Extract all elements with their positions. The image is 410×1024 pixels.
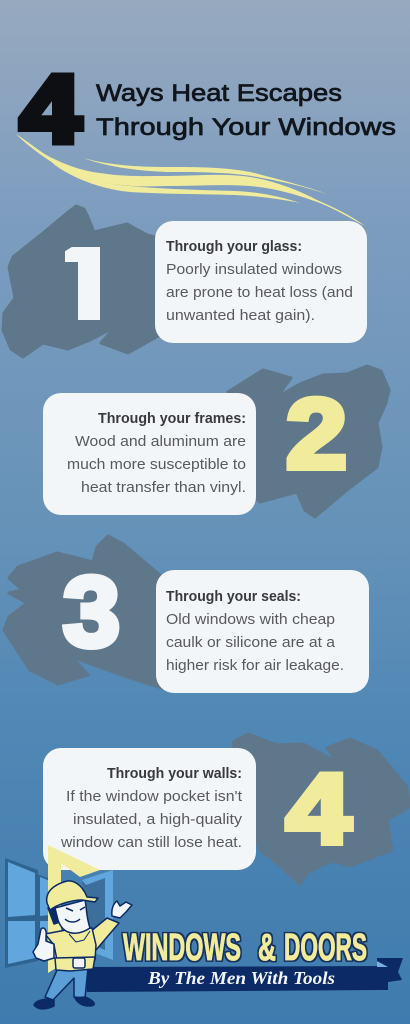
card 4: Through your walls: (107, 766, 242, 782)
card 3: Through your seals: (166, 589, 301, 605)
raised arm (90, 918, 119, 950)
card 3: higher risk for air leakage. (166, 658, 344, 674)
card 1: unwanted heat gain). (166, 308, 315, 324)
mascot (33, 881, 132, 1009)
brush blob 1 (3, 206, 160, 357)
card 4 (43, 748, 256, 870)
cap (47, 881, 98, 910)
card 1: Through your glass: (166, 239, 302, 255)
thumbs up hand (33, 928, 54, 961)
belt (55, 957, 95, 971)
hair (48, 905, 60, 924)
icon: open window (5, 845, 113, 973)
card 4: insulated, a high-quality (73, 812, 243, 828)
banner (85, 958, 403, 992)
numeral 1: 1 (56, 225, 116, 339)
card 3: caulk or silicone are at a (166, 635, 336, 651)
step 1 (3, 206, 367, 357)
torso (45, 928, 96, 960)
card 1 (155, 221, 367, 343)
card 4: window can still lose heat. (60, 835, 242, 851)
card 2: heat transfer than vinyl. (81, 480, 246, 496)
title text: Ways Heat Escapes (96, 80, 342, 107)
logo tagline: By The Men With Tools (147, 968, 335, 988)
card 3: Old windows with cheap (166, 612, 335, 628)
card 2: Wood and aluminum are (75, 434, 246, 450)
brush blob 4 (233, 734, 409, 884)
card 2: much more susceptible to (67, 457, 246, 473)
title (20, 56, 396, 163)
yellow frame triangle (48, 845, 100, 973)
card 3 (156, 570, 369, 693)
numeral 4: 4 (286, 753, 351, 864)
step 4 (43, 734, 409, 884)
brush blob 2 (228, 366, 389, 517)
card 1: are prone to heat loss (and (166, 285, 353, 301)
title text: Through Your Windows (96, 114, 396, 141)
card 1: Poorly insulated windows (166, 262, 342, 278)
step 3 (4, 536, 369, 693)
raised hand (112, 901, 132, 918)
collar (69, 931, 90, 942)
face features (65, 907, 85, 922)
legs (45, 968, 88, 1000)
logo wordmark: & (258, 927, 276, 969)
numeral 2: 2 (286, 378, 347, 489)
card 4: If the window pocket isn't (66, 789, 242, 805)
card 2 (43, 393, 256, 515)
logo: windows and doors (5, 845, 403, 1009)
shoes (34, 999, 54, 1009)
step 2 (43, 366, 389, 517)
numeral 3: 3 (63, 556, 120, 667)
logo wordmark: WINDOWS (123, 927, 241, 969)
yellow swoosh (16, 134, 365, 226)
card 2: Through your frames: (98, 411, 246, 427)
brush blob 3 (4, 536, 165, 689)
face (55, 900, 90, 933)
title numeral 4: 4 (20, 56, 81, 163)
title text (96, 80, 396, 141)
